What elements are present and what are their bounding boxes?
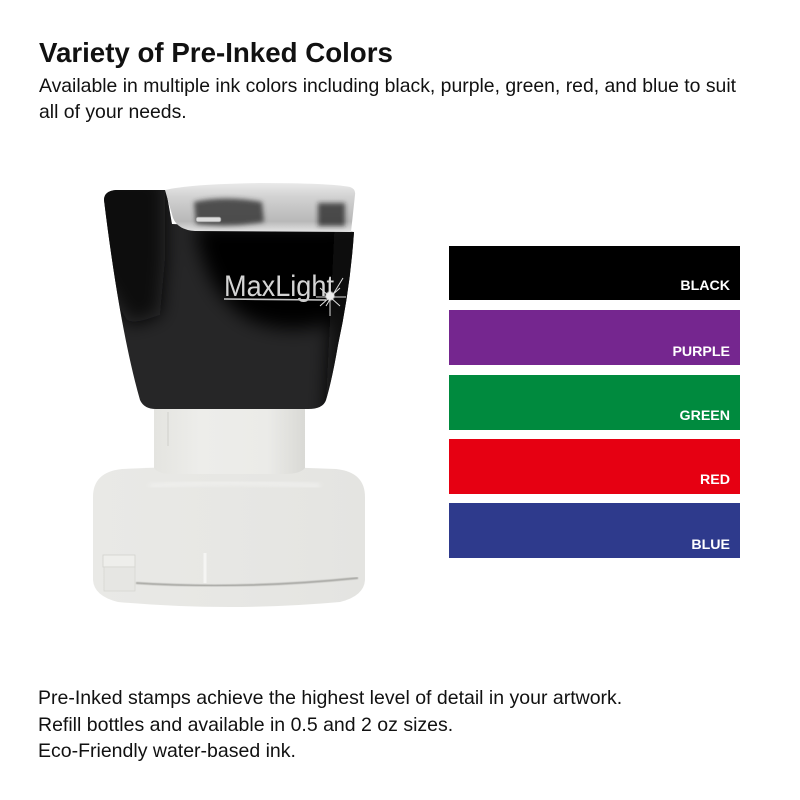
footer text <box>38 687 622 762</box>
stamp base <box>93 466 365 607</box>
swatch: purple: PURPLE <box>672 344 730 360</box>
swatch: blue: BLUE <box>691 537 730 553</box>
swatch: green <box>449 375 740 430</box>
stamp neck <box>154 408 305 474</box>
swatch: purple <box>449 310 740 365</box>
intro text: Available in multiple ink colors including black, purple, green, red, and blue to suit <box>39 75 736 97</box>
stamp body <box>104 190 354 409</box>
swatch: green: GREEN <box>680 408 730 424</box>
swatch: red: RED <box>700 472 730 488</box>
swatch: black <box>449 246 740 300</box>
footer text: Pre-Inked stamps achieve the highest level of detail in your artwork. <box>38 687 622 709</box>
swatch: black: BLACK <box>680 278 730 294</box>
swatch: red <box>449 439 740 494</box>
stamp product image <box>93 183 365 607</box>
swatch: blue <box>449 503 740 558</box>
stamp clear lid <box>165 183 356 232</box>
MaxLight logo: MaxLight <box>224 270 335 303</box>
footer text: Eco-Friendly water-based ink. <box>38 740 296 762</box>
intro text <box>39 75 736 123</box>
footer text: Refill bottles and available in 0.5 and 2 oz sizes. <box>38 714 453 736</box>
title: Variety of Pre-Inked Colors <box>39 37 393 68</box>
intro text: all of your needs. <box>39 101 187 123</box>
